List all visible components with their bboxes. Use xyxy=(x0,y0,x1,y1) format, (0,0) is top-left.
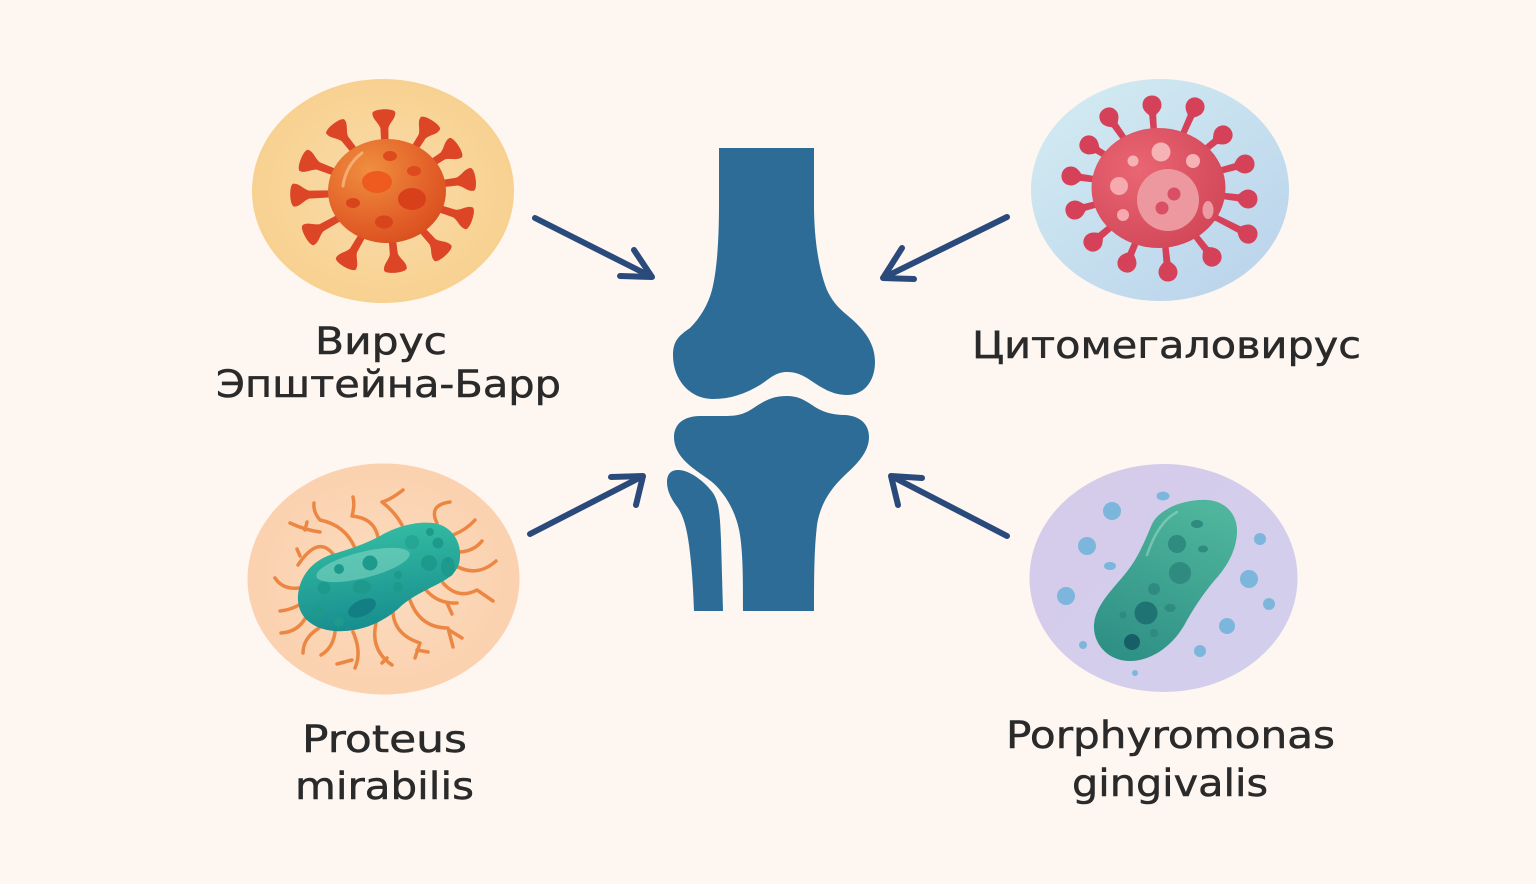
fibula xyxy=(667,470,723,611)
label: Proteus: Proteus xyxy=(302,718,467,761)
arrow: top right xyxy=(883,217,1007,279)
icon: orange virus xyxy=(290,109,477,274)
panel: Proteus mirabilis xyxy=(248,464,520,808)
icon: lilac disc xyxy=(1030,464,1298,692)
icon: blue disc xyxy=(1031,79,1289,301)
icon: flagella xyxy=(275,490,496,668)
label: Cytomegalovirus: Цитомегаловирус xyxy=(972,324,1361,367)
arrow: bottom right xyxy=(891,476,1007,536)
panel: Porphyromonas gingivalis xyxy=(1006,464,1335,805)
tibia xyxy=(674,396,869,611)
label: mirabilis: mirabilis xyxy=(295,765,474,808)
icon: green bacterium xyxy=(1094,500,1237,661)
label: Porphyromonas: Porphyromonas xyxy=(1006,714,1335,757)
label: Epstein-Barr: Вирус xyxy=(315,320,447,363)
icon: blue dots xyxy=(1057,492,1275,676)
icon: pink virus xyxy=(1060,94,1261,282)
femur xyxy=(673,148,875,399)
label: gingivalis: gingivalis xyxy=(1072,762,1268,805)
arrow: bottom left xyxy=(530,476,643,534)
icon: knee joint xyxy=(667,148,875,611)
icon: green bacterium xyxy=(298,523,460,631)
panel: Epstein-Barr virus xyxy=(216,79,561,406)
icon: peach disc xyxy=(248,464,520,694)
arrow: top left xyxy=(535,218,652,277)
icon: orange disc xyxy=(252,79,514,303)
label: Epstein-Barr line 2: Эпштейна-Барр xyxy=(216,363,561,406)
panel: Cytomegalovirus xyxy=(972,79,1361,367)
